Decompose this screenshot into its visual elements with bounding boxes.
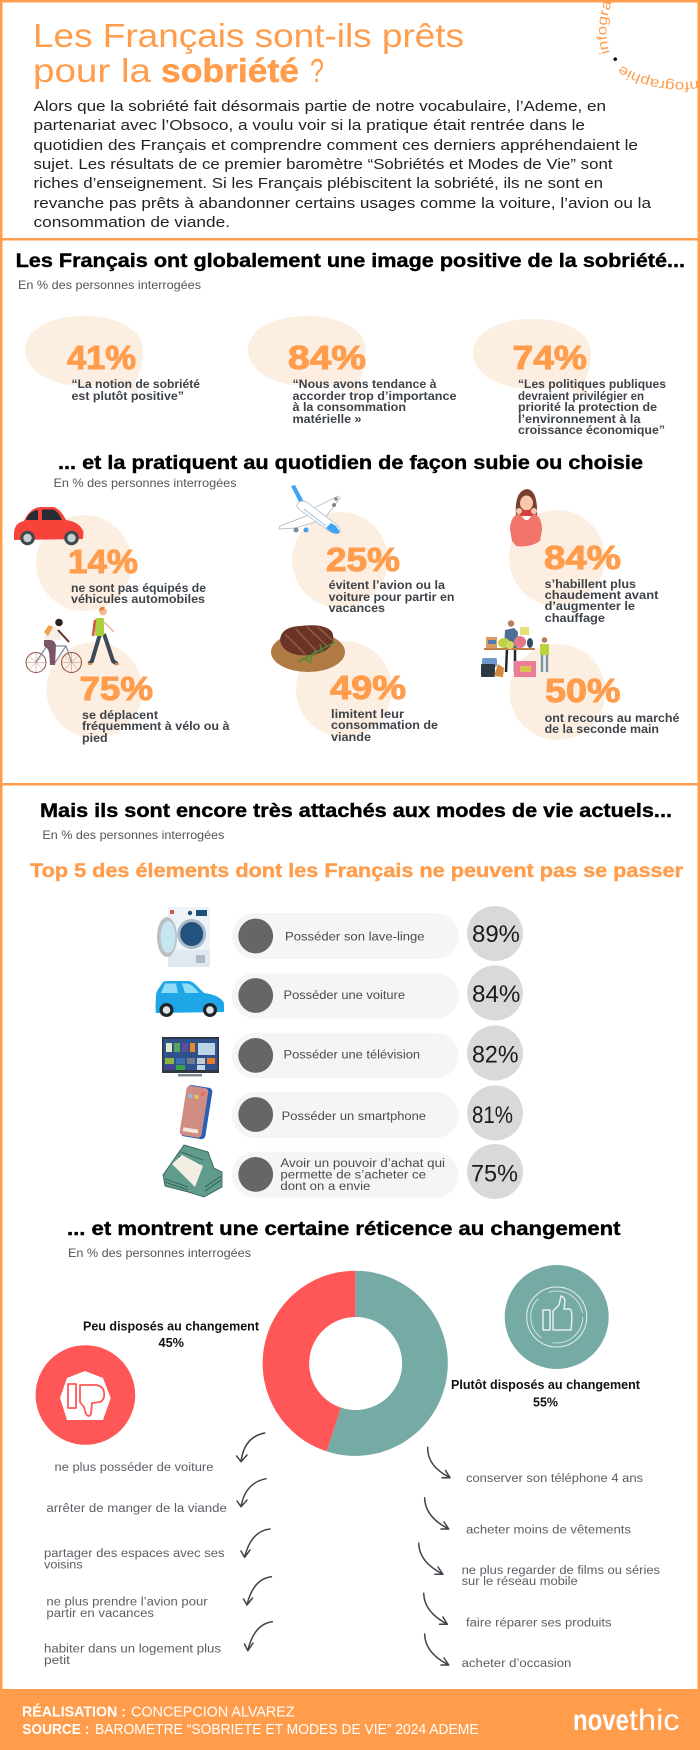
item: acheter moins de vêtements (466, 1525, 631, 1537)
row: voiture 84% (156, 966, 523, 1020)
icon: washing machine (157, 907, 210, 967)
item (462, 1565, 660, 1588)
arrow (425, 1634, 449, 1665)
panel: stat 75%: fréquemment à vélo ou à (82, 719, 230, 733)
item: habiter dans un logement plus (44, 1644, 221, 1656)
panel: stat 74%: priorité la protection de (518, 400, 657, 414)
footer (0, 1689, 700, 1750)
panel: stat 14%: véhicules automobiles (71, 592, 205, 606)
row: voiture 84%: 84% (472, 981, 520, 1008)
panel: stat 74%: croissance économique” (518, 423, 665, 437)
circular label: infographie: • (613, 52, 618, 66)
panel: stat 74% (473, 319, 666, 437)
row: lave-linge 89% (157, 906, 523, 967)
credits: RÉALISATION : (22, 1704, 126, 1721)
label: plutôt disposés: Plutôt disposés au changement (451, 1378, 641, 1392)
item: voisins (44, 1560, 83, 1572)
logo: novethic: nove (573, 1704, 629, 1737)
intro paragraph: revanche pas prêts à abandonner certains usages comme la voiture, l’avion ou la (34, 195, 652, 212)
panel: stat 14%: 14% (68, 544, 138, 581)
icon: thumb down (36, 1345, 135, 1445)
label: peu disposés: 45% (158, 1336, 184, 1350)
icon: thumb up (505, 1265, 609, 1369)
icon: steak on board (271, 625, 345, 672)
panel: stat 25%: voiture pour partir en (329, 590, 454, 604)
row: pouvoir d'achat 75%: Avoir un pouvoir d’achat qui (280, 1158, 445, 1170)
credits (22, 1704, 479, 1738)
heading: réticence: ... et montrent une certaine réticence au changement (67, 1218, 621, 1240)
item: partager des espaces avec ses (44, 1548, 225, 1560)
label: plutôt disposés: 55% (533, 1396, 558, 1410)
intro paragraph: partenariat avec l’Obsoco, a voulu voir si la pratique était rentrée dans le (34, 117, 585, 134)
panel: stat 84% (248, 316, 457, 426)
intro paragraph: riches d’enseignement. Si les Français plébiscitent la sobriété, ils ne sont en (34, 175, 603, 192)
panel: stat 84% heating: s’habillent plus (545, 577, 636, 591)
panel: stat 25% (279, 485, 454, 615)
icon: smartphone (179, 1084, 213, 1140)
item (44, 1644, 221, 1667)
item: ne plus regarder de films ou séries (462, 1565, 660, 1577)
credits: SOURCE : (22, 1722, 89, 1738)
panel: stat 25%: 25% (326, 542, 400, 579)
icon: blue car (156, 981, 224, 1017)
icon: second-hand market (481, 620, 549, 677)
intro paragraph (34, 98, 652, 231)
circular label: infographie (596, 2, 698, 92)
logo: novethic: thic (629, 1704, 680, 1737)
arrow (241, 1529, 270, 1557)
panel: stat 84%: 84% (288, 340, 366, 377)
panel: stat 75%: 75% (80, 671, 153, 708)
heading: top 5: Top 5 des élements dont les Français ne peuvent pas se passer (30, 860, 683, 882)
intro paragraph: sujet. Les résultats de ce premier baromètre “Sobriétés et Modes de Vie” sont (34, 156, 613, 173)
row: lave-linge 89%: Posséder son lave-linge (285, 932, 425, 944)
label: peu disposés: Peu disposés au changement (83, 1320, 260, 1334)
item: petit (44, 1655, 71, 1667)
arrow (425, 1498, 449, 1529)
panel: stat 84%: matérielle » (292, 412, 362, 426)
arrow (424, 1593, 447, 1624)
panel: stat 41%: est plutôt positive” (72, 389, 184, 403)
item: ne plus posséder de voiture (54, 1462, 213, 1474)
note: unit: En % des personnes interrogées (68, 1246, 251, 1260)
arrow (244, 1577, 271, 1605)
item: faire réparer ses produits (466, 1618, 612, 1630)
segment: 45% (263, 1271, 355, 1451)
row: pouvoir d'achat 75%: permette de s’acheter ce (280, 1170, 426, 1182)
heading: modes de vie: Mais ils sont encore très attachés aux modes de vie actuels... (40, 800, 672, 822)
panel: stat 50%: 50% (545, 673, 620, 710)
panel: stat 74%: 74% (512, 340, 587, 377)
panel: stat 41% (25, 316, 200, 403)
panel: stat 74%: “Les politiques publiques (518, 377, 666, 391)
arrow (237, 1479, 266, 1507)
title: pour la (33, 52, 152, 89)
icon: woman in sweater (510, 489, 542, 546)
heading: pratique: ... et la pratiquent au quotidien de façon subie ou choisie (58, 452, 643, 474)
item: arrêter de manger de la viande (46, 1503, 227, 1515)
item: partir en vacances (46, 1608, 154, 1620)
panel: stat 14%: ne sont pas équipés de (71, 581, 206, 595)
list: peu disposés (44, 1433, 272, 1667)
panel: stat 25%: évitent l’avion ou la (329, 578, 445, 592)
panel: stat 49%: 49% (330, 670, 406, 707)
panel: stat 49%: limitent leur (331, 707, 404, 721)
icon: television (162, 1037, 219, 1076)
item: ne plus prendre l’avion pour (46, 1597, 208, 1609)
panel: stat 49%: viande (331, 730, 371, 744)
item: sur le réseau mobile (462, 1576, 578, 1588)
panel: stat 14% (14, 507, 206, 611)
panel: stat 84% heating: chauffage (545, 611, 605, 625)
title: ? (310, 52, 324, 89)
arrow (244, 1622, 272, 1651)
panel: stat 84% heating: d’augmenter le (545, 599, 635, 613)
icon: plane (279, 485, 340, 534)
title: sobriété (161, 52, 299, 89)
row: smartphone 81% (179, 1084, 523, 1140)
panel: stat 84%: accorder trop d’importance (292, 389, 457, 403)
arrow (237, 1433, 265, 1462)
row: pouvoir d'achat 75%: 75% (471, 1161, 518, 1188)
title (33, 17, 464, 89)
row: pouvoir d'achat 75% (163, 1144, 523, 1199)
arrow (428, 1447, 450, 1478)
label: plutôt disposés (451, 1378, 641, 1410)
segment: 55% (327, 1271, 448, 1456)
note: unit: En % des personnes interrogées (54, 476, 236, 490)
donut chart (263, 1271, 448, 1456)
item (46, 1597, 208, 1620)
panel: stat 49% (271, 625, 438, 744)
list: plutôt disposés (419, 1447, 660, 1670)
panel: stat 75% (26, 607, 230, 745)
heading: image positive: Les Français ont globalement une image positive de la sobriété... (16, 250, 685, 272)
panel: stat 50%: ont recours au marché (545, 711, 680, 725)
icon: red car (14, 507, 84, 545)
panel: stat 74%: l’environnement à la (518, 412, 641, 426)
row: smartphone 81%: Posséder un smartphone (282, 1111, 426, 1123)
note: unit: En % des personnes interrogées (42, 828, 224, 842)
label: peu disposés (83, 1320, 260, 1350)
panel: stat 84%: à la consommation (292, 400, 406, 414)
row: télévision 82%: 82% (472, 1042, 518, 1069)
credits: CONCEPCION ALVAREZ (131, 1705, 295, 1721)
panel: stat 75%: se déplacent (82, 708, 158, 722)
row: télévision 82% (162, 1026, 523, 1080)
row: pouvoir d'achat 75%: dont on a envie (280, 1181, 370, 1193)
panel: stat 25%: vacances (329, 601, 385, 615)
item (44, 1548, 225, 1572)
note: unit: En % des personnes interrogées (18, 278, 201, 292)
panel: stat 84%: “Nous avons tendance à (292, 377, 437, 391)
panel: stat 50%: de la seconde main (545, 722, 659, 736)
icon: money stacks (163, 1145, 222, 1197)
row: voiture 84%: Posséder une voiture (284, 990, 405, 1002)
panel: stat 75%: pied (82, 731, 108, 745)
arrow (419, 1543, 443, 1574)
row: télévision 82%: Posséder une télévision (284, 1050, 420, 1062)
panel: stat 41%: 41% (67, 340, 136, 377)
intro paragraph: Alors que la sobriété fait désormais partie de notre vocabulaire, l’Ademe, en (34, 98, 606, 115)
title: Les Français sont-ils prêts (33, 17, 464, 54)
row: smartphone 81%: 81% (472, 1102, 513, 1129)
item: acheter d’occasion (462, 1658, 571, 1670)
panel: stat 50% (481, 620, 680, 740)
row: lave-linge 89%: 89% (472, 921, 520, 948)
panel: stat 84% heating: chaudement avant (545, 588, 658, 602)
icon: cyclist and pedestrian (26, 607, 119, 672)
panel: stat 84% heating: 84% (544, 540, 621, 577)
credits: BAROMETRE “SOBRIETE ET MODES DE VIE” 2024 ADEME (95, 1722, 479, 1738)
logo: novethic (573, 1704, 680, 1737)
intro paragraph: quotidien des Français et comprendre comment ces derniers appréhendaient le (34, 137, 638, 154)
panel: stat 41%: “La notion de sobriété (72, 377, 200, 391)
intro paragraph: consommation de viande. (34, 214, 230, 231)
panel: stat 49%: consommation de (331, 718, 438, 732)
item: conserver son téléphone 4 ans (466, 1473, 643, 1485)
panel: stat 84% heating (509, 489, 658, 625)
panel: stat 74%: devraient privilégier en (518, 389, 644, 403)
